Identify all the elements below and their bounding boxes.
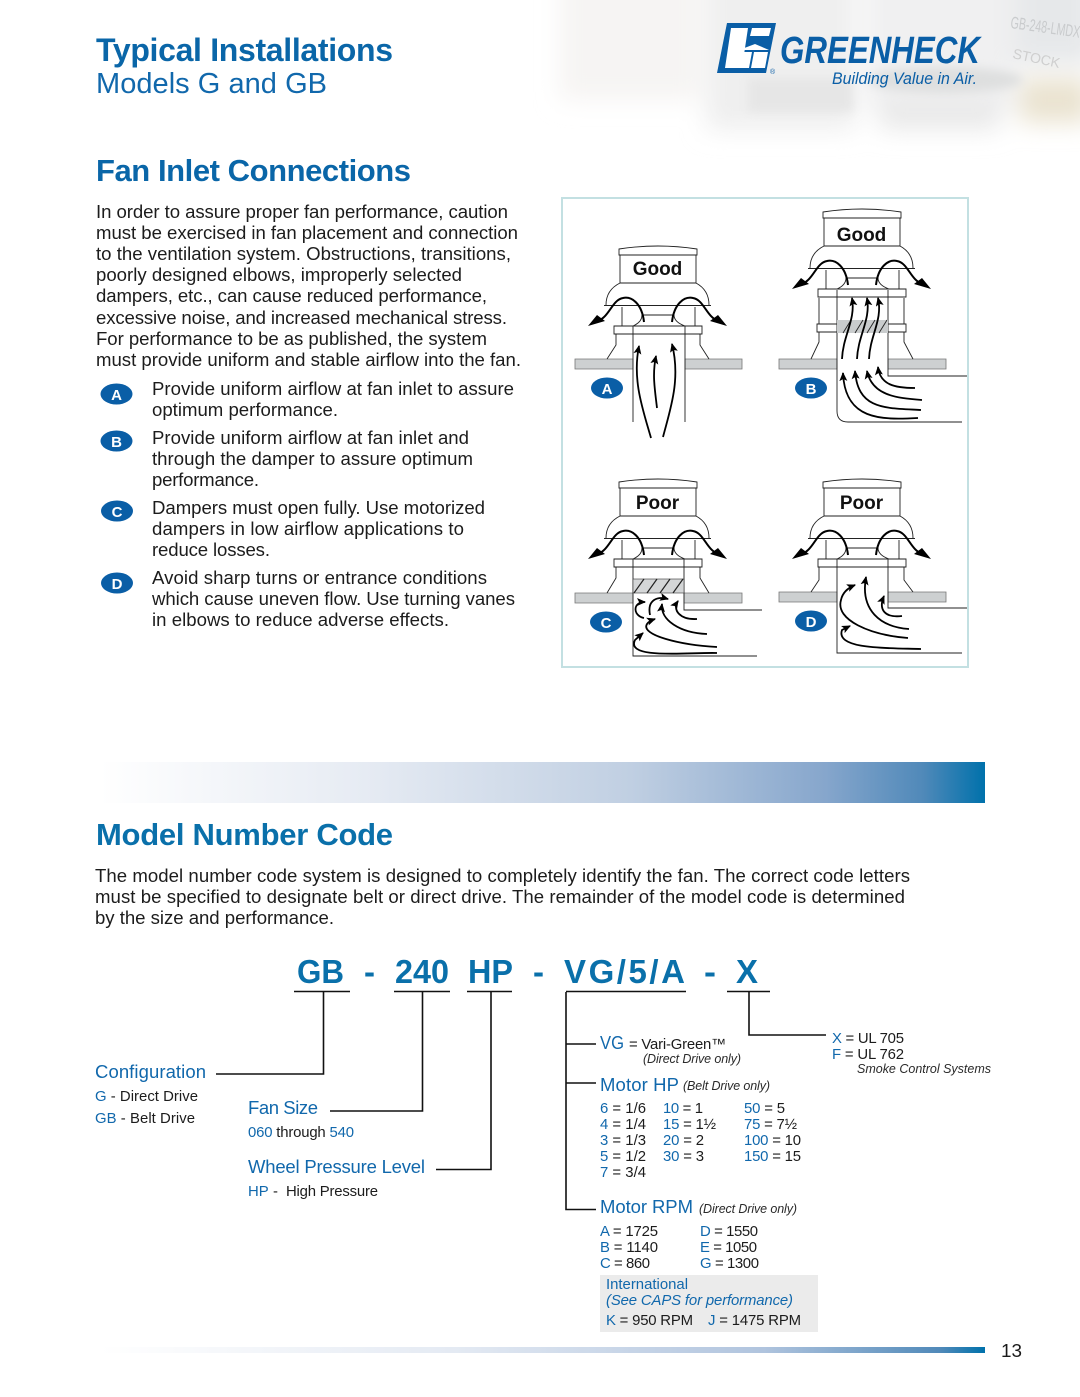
intro text block: In order to assure proper fan performance, caution [96,201,508,222]
callout: UL listings: X = UL 705 [832,1031,904,1047]
callout: motor RPM: (Direct Drive only) [699,1202,797,1216]
model code string [297,953,758,990]
model code string: - [704,953,716,990]
callout: motor HP: 100 = 10 [744,1133,801,1149]
callout: configuration: GB - Belt Drive [95,1111,195,1127]
callout: UL listings: Smoke Control Systems [857,1062,991,1076]
list item D: in elbows to reduce adverse effects. [152,609,449,630]
callout: wheel pressure level: Wheel Pressure Level [248,1156,425,1177]
callout: motor RPM: Motor RPM [600,1196,693,1217]
list item C: C [112,504,123,521]
model code intro text: The model number code system is designed to completely identify the fan. The correct code letters [95,865,910,886]
callout: motor HP: 7 = 3/4 [600,1165,646,1181]
heading: Model Number Code: Model Number Code [96,817,393,852]
callout: motor HP: 30 = 3 [663,1149,704,1165]
list item D: D [112,576,123,593]
callout: configuration [95,1061,206,1127]
intro text block: must be exercised in fan placement and connection [96,222,518,243]
diagram C: poor inlet with damper at elbow [575,479,762,656]
international box: J = 1475 RPM [708,1313,801,1329]
callout: fan size: Fan Size [248,1097,318,1118]
international box [600,1275,818,1332]
diagram D: poor inlet with sharp elbow: D [806,614,817,631]
list item A: A [111,387,122,404]
intro text block [96,201,521,370]
callout: motor HP: 6 = 1/6 [600,1101,646,1117]
diagram C: poor inlet with damper at elbow: Poor [636,493,680,514]
callout: motor HP: 150 = 15 [744,1149,801,1165]
diagram A: good inlet [575,246,742,438]
panel: fan inlet diagrams [562,198,968,667]
callout: motor HP: 75 = 7½ [744,1117,798,1133]
model code string: 240 [395,953,449,990]
international box: K = 950 RPM [606,1313,693,1329]
callout: configuration: G - Direct Drive [95,1089,198,1105]
intro text block: excessive noise, and increased mechanical stress. [96,307,507,328]
model code string: GB [297,953,344,990]
footer band [100,1347,985,1353]
list item B [100,427,473,490]
list item D: Avoid sharp turns or entrance conditions [152,567,487,588]
callout: motor RPM [600,1196,797,1272]
callout: motor HP: 15 = 1½ [663,1117,717,1133]
model code string: HP [468,953,513,990]
callout: motor RPM: G = 1300 [700,1256,759,1272]
diagram D: poor inlet with sharp elbow: Poor [840,493,884,514]
list item D [101,567,515,630]
model code string: - [533,953,544,990]
intro text block: For performance to be as published, the system [96,328,487,349]
header background photo [560,0,1080,130]
list item A: optimum performance. [152,399,338,420]
intro text block: poorly designed elbows, improperly selected [96,264,462,285]
list item A: Provide uniform airflow at fan inlet to assure [152,378,514,399]
diagram A: good inlet: A [602,381,613,398]
callout: wheel pressure level: High Pressure [286,1184,378,1200]
title: Models G and GB [96,68,327,100]
international box: International [606,1277,688,1293]
intro text block: dampers, etc., can cause reduced performance, [96,285,487,306]
callout: UL listings [832,1031,991,1076]
callout: wheel pressure level: HP [248,1184,269,1200]
logo: Greenheck: Building Value in Air. [832,69,977,88]
diagram D: poor inlet with sharp elbow [779,479,967,653]
callout: VG: (Direct Drive only) [643,1052,741,1066]
intro text block: to the ventilation system. Obstructions, transitions, [96,243,511,264]
callout: VG [600,1032,741,1066]
callout: motor HP: 3 = 1/3 [600,1133,646,1149]
callout: UL listings: F = UL 762 [832,1047,904,1063]
callout: motor HP: (Belt Drive only) [683,1079,770,1093]
diagram A: good inlet: Good [633,259,682,280]
callout: motor RPM: D = 1550 [700,1224,758,1240]
callout: motor HP: 50 = 5 [744,1101,785,1117]
callout: motor HP [600,1074,801,1181]
international box: (See CAPS for performance) [606,1293,793,1309]
callout: configuration: Configuration [95,1061,206,1082]
diagram C: poor inlet with damper at elbow: C [601,615,612,632]
model code string: X [736,953,758,990]
callout: motor HP: 5 = 1/2 [600,1149,646,1165]
model code intro text: by the size and performance. [95,907,334,928]
list item C [101,497,485,560]
list item B: Provide uniform airflow at fan inlet and [152,427,469,448]
callout: motor HP: 10 = 1 [663,1101,703,1117]
title: Typical Installations [96,32,393,68]
logo: Greenheck [717,23,982,88]
callout: motor RPM: A = 1725 [600,1224,658,1240]
logo: Greenheck: ® [770,68,776,76]
diagram B: good inlet with damper [779,209,967,422]
callout: motor RPM: C = 860 [600,1256,650,1272]
list item B: performance. [152,469,259,490]
model code string: VG/5/A [564,953,685,990]
callout: motor HP: 20 = 2 [663,1133,704,1149]
page number: 13 [1001,1340,1022,1361]
connector lines [216,992,826,1210]
callout: fan size [248,1097,354,1141]
diagram B: good inlet with damper: Good [837,225,886,246]
list item B: B [111,434,122,451]
callout: VG: VG [600,1032,624,1053]
model code intro text: must be specified to designate belt or direct drive. The remainder of the model code is determined [95,886,905,907]
list item B: through the damper to assure optimum [152,448,473,469]
list item D: which cause uneven flow. Use turning vanes [151,588,515,609]
list item C: reduce losses. [152,539,270,560]
intro text block: must provide uniform and stable airflow into the fan. [96,349,521,370]
diagram B: good inlet with damper: B [806,381,817,398]
callout: motor RPM: B = 1140 [600,1240,658,1256]
callout: motor HP: 4 = 1/4 [600,1117,646,1133]
callout: motor RPM: E = 1050 [700,1240,757,1256]
list item A [100,378,514,420]
callout: wheel pressure level [248,1156,425,1200]
header background photo: STOCK [1011,45,1062,71]
title [96,32,393,100]
callout: fan size: 060 through 540 [248,1125,354,1141]
callout: motor HP: Motor HP [600,1074,679,1095]
callout: wheel pressure level: - [273,1184,278,1200]
gradient band [100,762,985,803]
logo: Greenheck: GREENHECK [780,30,982,72]
heading: Fan Inlet Connections: Fan Inlet Connections [96,153,411,188]
model code intro text [95,865,910,928]
model code string: - [364,953,375,990]
callout: VG: = Vari-Green™ [629,1037,726,1053]
list item C: Dampers must open fully. Use motorized [152,497,485,518]
list item C: dampers in low airflow applications to [152,518,464,539]
